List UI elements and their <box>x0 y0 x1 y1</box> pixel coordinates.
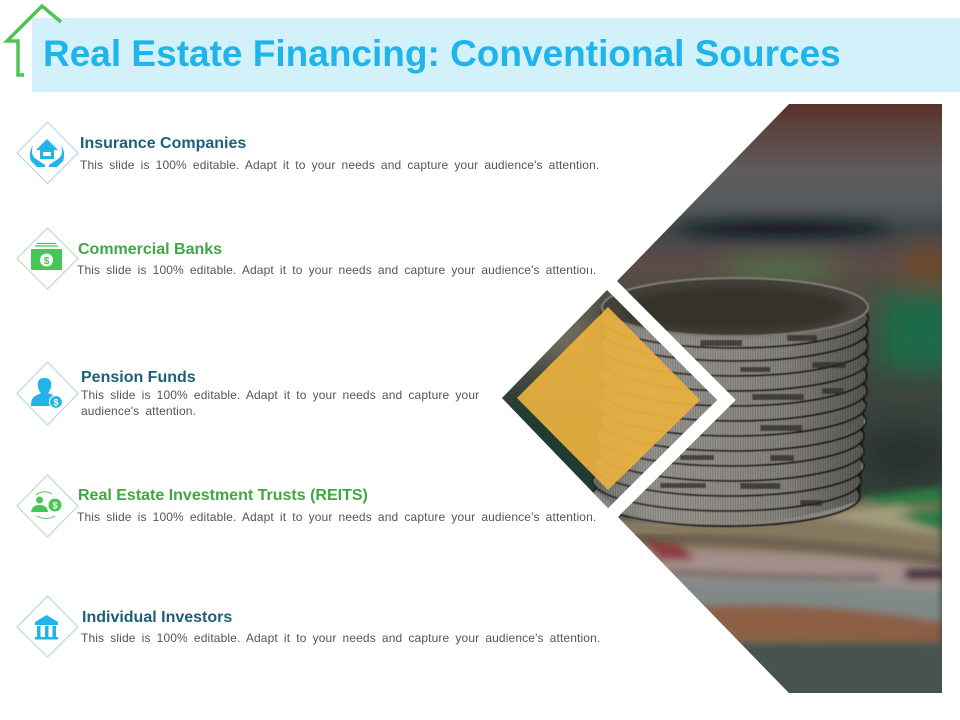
coin inscriptions <box>660 335 846 506</box>
icon: people and dollar exchange <box>16 474 78 538</box>
icon: person with dollar: $ <box>53 398 59 408</box>
icon: banknotes: $ <box>44 256 50 267</box>
heading: Real Estate Investment Trusts (REITS) <box>78 487 368 504</box>
item: insurance companies <box>16 121 599 184</box>
blurred background colours <box>490 247 960 510</box>
coin top face <box>602 278 868 336</box>
item: real estate investment trusts <box>16 474 596 538</box>
heading: Individual Investors <box>82 609 232 626</box>
item: individual investors <box>16 595 600 658</box>
item: pension funds <box>16 361 479 426</box>
heading: Pension Funds <box>81 369 196 386</box>
photo: coin stack with accent diamond <box>502 104 942 693</box>
coins <box>590 278 870 530</box>
body text: This slide is 100% editable. Adapt it to your needs and capture your audience's attention. <box>81 631 600 645</box>
item: commercial banks <box>16 227 596 290</box>
title: Real Estate Financing: Conventional Sources <box>43 33 841 74</box>
icon: hands holding house <box>16 121 78 184</box>
accent diamond <box>517 307 700 490</box>
icon: person with dollar <box>16 361 78 426</box>
body text: This slide is 100% editable. Adapt it to your needs and capture your audience's attention. <box>77 263 596 277</box>
body text: This slide is 100% editable. Adapt it to your needs and capture your audience's attention. <box>77 510 596 524</box>
icon: people and dollar exchange: $ <box>52 500 58 512</box>
icon: banknotes <box>16 227 78 290</box>
heading: Commercial Banks <box>78 241 222 258</box>
body text: This slide is 100% editable. Adapt it to your needs and capture your audience's attention. <box>81 388 479 418</box>
banknotes <box>600 487 950 702</box>
heading: Insurance Companies <box>80 135 246 152</box>
title band <box>32 18 960 92</box>
body text: This slide is 100% editable. Adapt it to your needs and capture your audience's attention. <box>80 158 599 172</box>
icon: bank building <box>16 595 78 658</box>
icon: house outline <box>2 4 62 77</box>
